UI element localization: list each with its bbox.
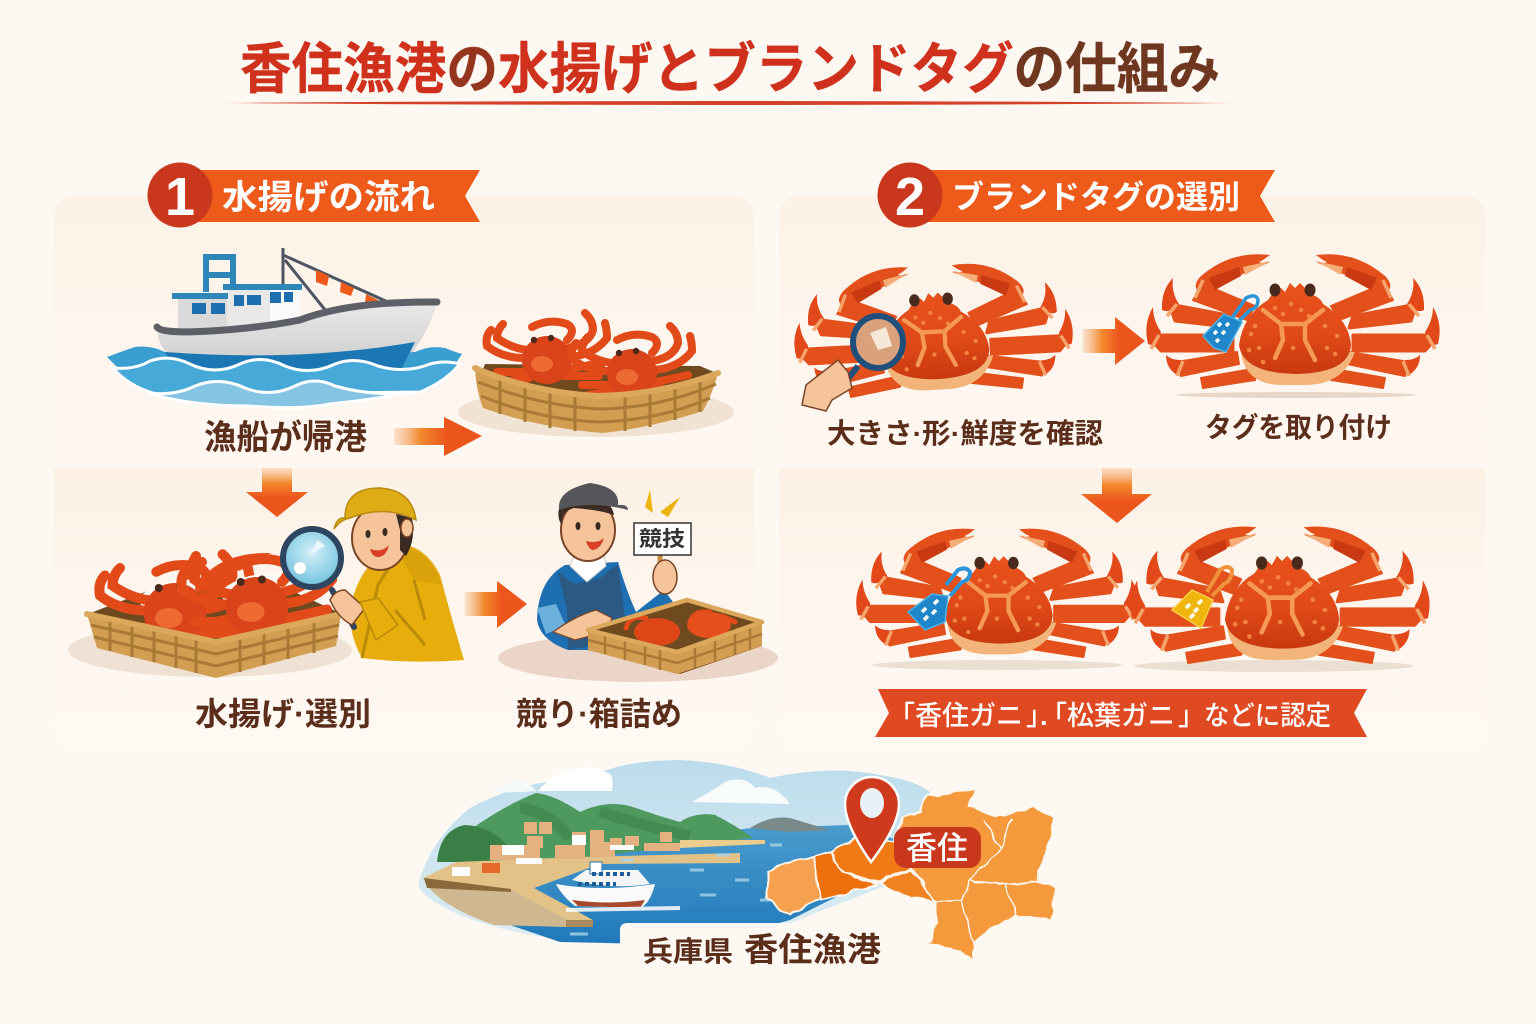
icon: crab with blue tag <box>1146 254 1440 398</box>
location caption <box>620 923 926 985</box>
icon: crab under magnifier <box>791 258 1076 411</box>
icon: crab with yellow tag, Matsuba <box>1130 526 1430 672</box>
arrow <box>1081 468 1152 523</box>
arrow <box>246 468 308 517</box>
section ribbon 1 <box>148 162 480 228</box>
map label: 香住: 香住 <box>906 830 968 866</box>
banner: certification: 「松葉ガニ <box>1040 701 1175 731</box>
banner: certification <box>875 689 1367 737</box>
icon: crab with blue tag, Kasumi <box>856 529 1138 670</box>
panel background: right <box>779 195 1486 750</box>
banner: certification: . <box>1040 701 1048 731</box>
section ribbon 1: 水揚げの流れ <box>222 179 435 217</box>
section ribbon 2 <box>878 162 1275 228</box>
panel: ブランドタグの選別 <box>779 162 1486 750</box>
scene: harbor sky and clouds <box>418 760 930 944</box>
map: Hyogo prefecture <box>768 788 1056 960</box>
map pin <box>845 777 899 862</box>
map label: 香住 <box>894 827 981 868</box>
scene: ferry <box>556 845 782 934</box>
banner: certification: 」 <box>1026 701 1053 731</box>
scene: sea <box>510 825 930 945</box>
panel background: left <box>54 195 754 750</box>
icon: fishing boat on waves <box>107 248 462 408</box>
scene: harbor buildings and quay <box>423 822 765 927</box>
title: 香住漁港の水揚げとブランドタグの仕組み <box>240 38 1220 100</box>
location caption: 兵庫県 <box>643 936 733 967</box>
label: 競り・箱詰め: 競り·箱詰め <box>516 696 682 732</box>
arrow <box>465 581 527 628</box>
panel: location map <box>418 760 1056 985</box>
section ribbon 1: 1 <box>165 167 195 227</box>
arrow <box>394 417 482 456</box>
icon: worker with sign and basket <box>498 483 778 682</box>
scene: mountains <box>437 793 830 862</box>
location caption: 香住漁港 <box>744 931 881 968</box>
arrow <box>1083 317 1145 365</box>
icon: inspector with magnifier <box>283 488 464 662</box>
label: 大きさ・形・鮮度を確認: 大きさ·形·鮮度を確認 <box>827 418 1103 449</box>
icon: crab basket 2 <box>68 548 352 678</box>
banner: certification: 」 <box>1178 701 1205 731</box>
banner: certification: 「香住ガニ <box>888 701 1023 731</box>
panel: 水揚げの流れ <box>54 162 778 750</box>
banner: certification: などに認定 <box>1204 701 1331 731</box>
section ribbon 2: 2 <box>895 167 925 227</box>
label: 漁船が帰港: 漁船が帰港 <box>204 418 367 457</box>
section ribbon 2: ブランドタグの選別 <box>952 179 1240 215</box>
icon: worker with sign and basket: 競技 <box>639 528 685 551</box>
label: タグを取り付け: タグを取り付け <box>1205 411 1392 443</box>
icon: crab basket <box>458 313 734 437</box>
label: 水揚げ・選別: 水揚げ·選別 <box>195 696 371 732</box>
